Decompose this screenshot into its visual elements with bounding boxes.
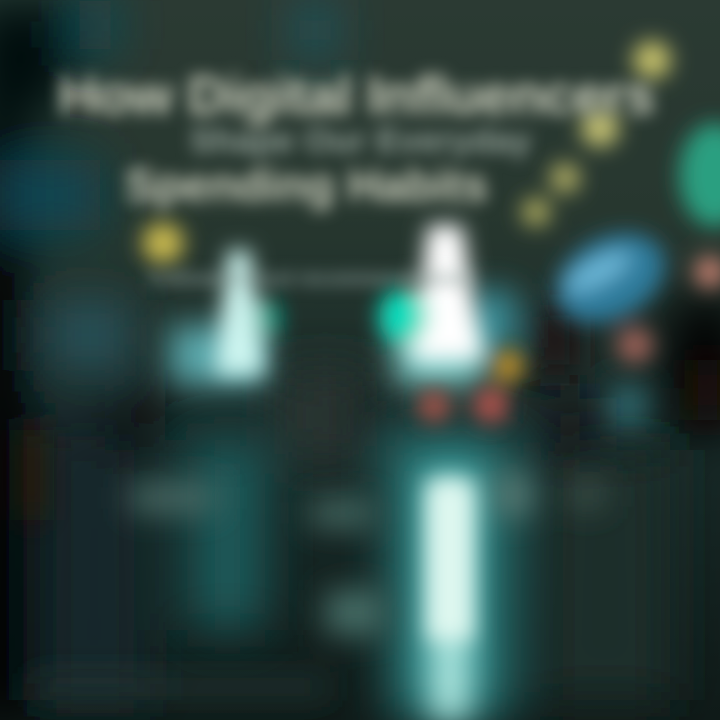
subtitle: Followers trust recommendations <box>150 268 471 290</box>
title: Spending Habits <box>125 159 488 211</box>
title: Shape Our Everyday <box>190 122 532 160</box>
title: How Digital Influencers <box>58 64 655 126</box>
title <box>49 64 662 221</box>
